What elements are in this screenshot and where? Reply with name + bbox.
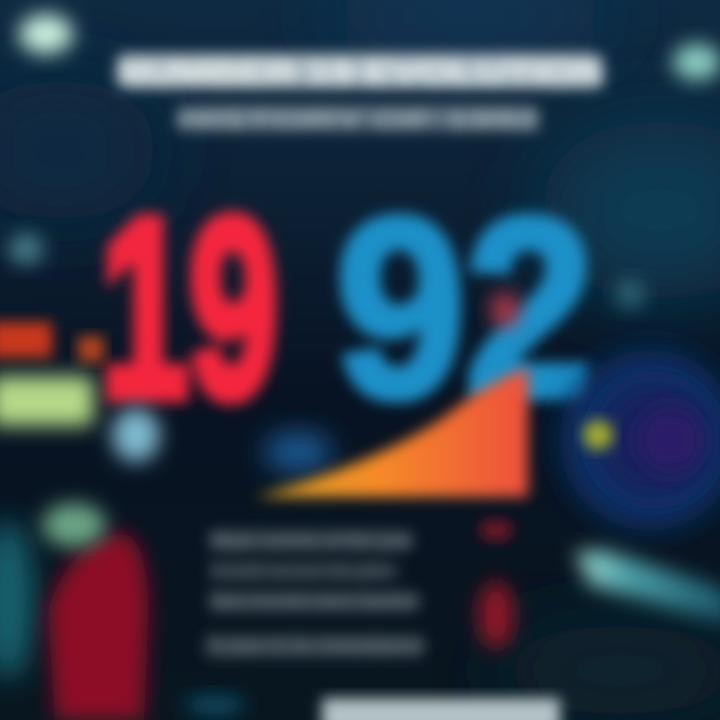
subtitle bbox=[176, 105, 540, 135]
title: NUMBER 19 EVOLUTION bbox=[115, 52, 605, 93]
text list: New records were reached bbox=[210, 591, 420, 612]
text list: Major events of the year bbox=[210, 531, 416, 552]
bottom bar bbox=[322, 698, 560, 720]
text list bbox=[205, 530, 425, 657]
icon: pale blue blob bbox=[112, 408, 160, 462]
glow: top right light bbox=[673, 44, 720, 80]
right panel: circular radar bbox=[560, 350, 720, 530]
left panel: coloured bars bbox=[0, 322, 104, 426]
glow: top left light bbox=[19, 14, 73, 54]
light streak bbox=[575, 550, 720, 625]
rising area chart bbox=[255, 292, 528, 497]
big number: 92: 92 bbox=[336, 166, 594, 451]
text list: A year to be remembered bbox=[210, 636, 425, 657]
subtitle: HISTORY OF 1992 bbox=[176, 105, 540, 135]
glow: right small light bbox=[616, 280, 644, 308]
icon: yellow dot bbox=[583, 420, 613, 450]
text list: Growth across the globe bbox=[210, 561, 400, 582]
bottom accent bbox=[185, 695, 245, 715]
red markers bbox=[478, 519, 514, 649]
big number: 19: 19 bbox=[100, 166, 278, 451]
figure: red silhouette bbox=[0, 503, 148, 720]
glow: left small light bbox=[9, 234, 43, 264]
